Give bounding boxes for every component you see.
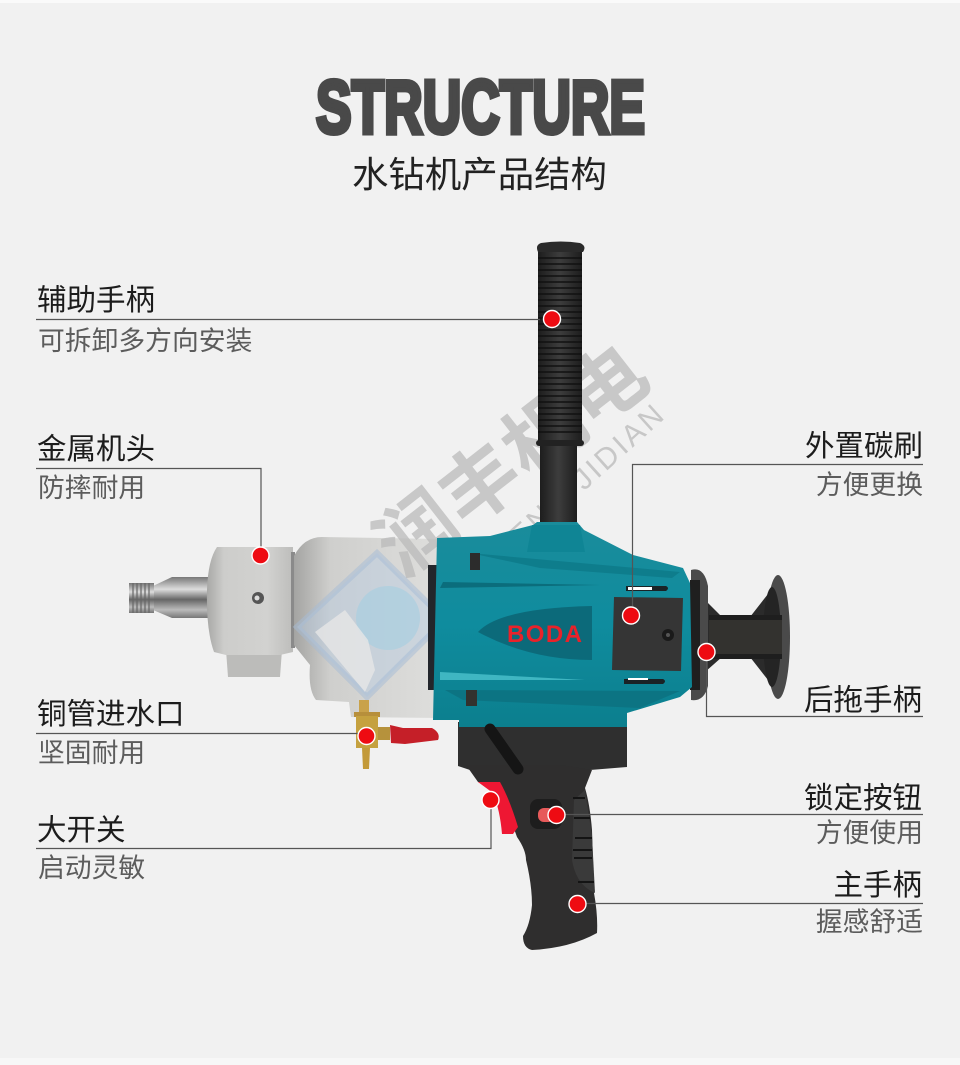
watermark: blue logo diamond [297, 553, 445, 697]
callout: main switch [36, 792, 499, 883]
bottom edge strip [0, 1058, 960, 1065]
auxiliary handle [536, 242, 584, 524]
callout: lock button [548, 782, 923, 848]
top edge strip [0, 0, 960, 3]
marker: main handle [569, 896, 586, 912]
callout: metal head [36, 433, 269, 564]
description: main handle: 握感舒适 [816, 907, 923, 937]
gearbox block [458, 722, 627, 770]
marker: lock button [548, 806, 565, 824]
description: lock button: 方便使用 [816, 818, 923, 848]
callout: main handle [569, 869, 923, 937]
teal body [433, 522, 692, 727]
label: lock button: 锁定按钮 [804, 782, 922, 815]
dark seam [428, 565, 440, 690]
pistol grip [466, 765, 597, 950]
lock lever [490, 729, 518, 769]
description: metal head: 防摔耐用 [38, 473, 145, 503]
label: main handle: 主手柄 [833, 869, 922, 902]
marker: main switch [482, 792, 499, 808]
callout: rear handle [698, 644, 923, 717]
trigger [478, 782, 518, 834]
chuck [129, 577, 208, 618]
rear handle [690, 569, 790, 700]
marker: rear handle [698, 644, 715, 660]
label: main switch: 大开关 [37, 814, 126, 847]
description: main switch: 启动灵敏 [38, 853, 145, 883]
label: metal head: 金属机头 [37, 433, 155, 466]
drill illustration [129, 242, 790, 950]
title: STRUCTURE [316, 65, 645, 149]
label: carbon brush: 外置碳刷 [805, 430, 923, 463]
description: carbon brush: 方便更换 [816, 470, 923, 500]
carbon brush cover [612, 597, 683, 671]
label: rear handle: 后拖手柄 [804, 684, 922, 717]
marker: carbon brush [622, 607, 640, 624]
vent slots [626, 586, 668, 591]
label: water inlet: 铜管进水口 [37, 698, 185, 731]
label: auxiliary handle: 辅助手柄 [37, 284, 155, 317]
water inlet valve [354, 700, 439, 769]
lock button [530, 799, 562, 829]
callout: water inlet [36, 698, 375, 768]
silver motor housing [294, 537, 440, 718]
callout: auxiliary handle [36, 284, 560, 356]
logo badge [478, 606, 592, 660]
marker: auxiliary handle [544, 310, 560, 328]
marker: metal head [252, 547, 269, 564]
watermark: brand name: 润丰机电 [359, 326, 666, 592]
description: water inlet: 坚固耐用 [38, 738, 145, 768]
brand logo: BODA [507, 621, 582, 648]
subtitle: 水钻机产品结构 [352, 154, 607, 195]
description: auxiliary handle: 可拆卸多方向安装 [38, 326, 252, 356]
marker: water inlet [358, 728, 375, 744]
watermark: brand pinyin: RUNFENG JIDIAN [433, 399, 670, 617]
callout: carbon brush [622, 430, 923, 624]
metal head [207, 547, 295, 677]
grip ribs [572, 790, 595, 893]
